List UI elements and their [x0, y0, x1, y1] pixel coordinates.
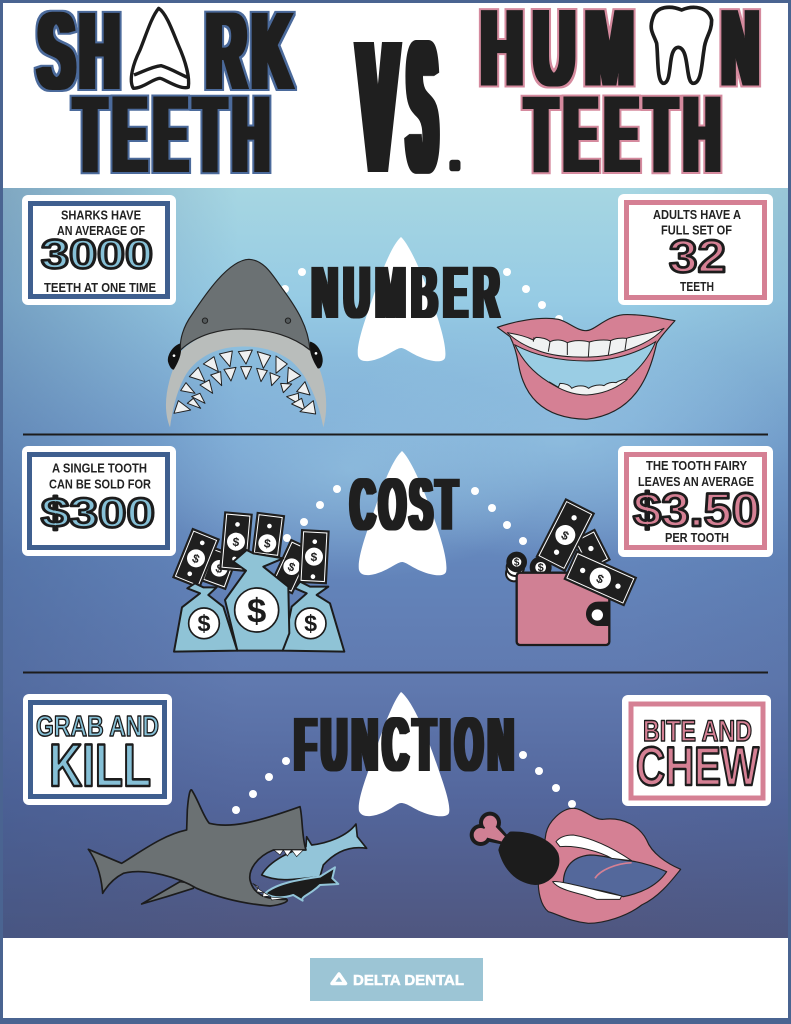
illustration: wallet with cash: $ [538, 562, 544, 574]
bill: $ [190, 551, 202, 566]
panel: human cost callout [618, 446, 773, 557]
coins [506, 553, 551, 581]
upper teeth [556, 835, 632, 861]
illustration: smiling lips [497, 315, 675, 419]
mouth opening [563, 855, 667, 897]
panel: human number callout: FULL SET OF [661, 222, 732, 238]
shark jaw [166, 329, 326, 427]
illustration: money bags: $ [304, 611, 317, 637]
tongue line [595, 863, 632, 878]
number: $300: $300 [41, 489, 155, 536]
logo triangle icon [332, 974, 346, 984]
dollar badges [189, 588, 326, 639]
panel: human cost callout: LEAVES AN AVERAGE [638, 474, 754, 489]
number: 3000: 3000 [41, 231, 153, 277]
heading: function: FUNCTION [294, 702, 519, 788]
illustration: money bags: $ [247, 592, 266, 630]
heading: number: NUMBER [312, 252, 505, 335]
center bag [225, 550, 289, 651]
panel: shark function callout [23, 694, 172, 805]
illustration: shark biting fish [88, 790, 367, 906]
bill [173, 529, 219, 588]
white shark tooth backdrop: cost [359, 451, 446, 575]
bill: $ [232, 535, 240, 549]
title: versus: S [409, 0, 435, 212]
panel: shark number callout: SHARKS HAVE [61, 208, 141, 222]
upper teeth [507, 328, 664, 357]
shark eyes [168, 342, 323, 370]
panel: human number callout: TEETH [680, 279, 714, 294]
icon: human tooth letter A [651, 7, 712, 83]
shark head top [180, 259, 310, 350]
shark teeth [174, 350, 316, 414]
illustration: money bags [173, 512, 344, 652]
bill: $ [286, 559, 298, 575]
panel: shark function callout: GRAB AND [36, 711, 159, 743]
title: versus: V [359, 1, 397, 213]
mouth opening [515, 342, 656, 394]
upper teeth gaps [533, 337, 627, 357]
illustration: wallet with cash: $ [514, 557, 520, 568]
blue fish [262, 824, 367, 880]
white shark tooth backdrop: number [358, 237, 445, 361]
fin [142, 882, 195, 904]
panel: shark number callout [22, 195, 176, 305]
right bag [283, 582, 344, 652]
bill [565, 551, 636, 605]
section divider lines [23, 434, 768, 674]
bill: $ [263, 536, 272, 551]
title: human teeth: TEETH [526, 74, 728, 197]
icon: shark tooth letter A [131, 8, 189, 88]
lower teeth [549, 379, 627, 395]
bill [201, 548, 237, 589]
panel: shark cost callout: CAN BE SOLD FOR [49, 476, 152, 492]
number: 32: 32 [669, 231, 726, 282]
drumstick meat [498, 832, 559, 885]
bill [253, 513, 284, 557]
lips [538, 808, 681, 923]
bill: $ [214, 561, 225, 576]
panel: human number callout [618, 194, 773, 305]
dotted arcs [232, 268, 576, 814]
illustration: money bags: $ [198, 611, 211, 637]
white shark tooth backdrop: function [359, 692, 449, 816]
bill [220, 512, 252, 571]
panel: shark number callout: AN AVERAGE OF [57, 223, 145, 238]
illustration: shark head [166, 259, 326, 427]
wallet body [517, 573, 609, 645]
panel: human cost callout: PER TOOTH [665, 530, 729, 545]
title: shark teeth: TEETH [75, 74, 277, 197]
logo: delta dental [310, 958, 483, 1001]
illustration: wallet with cash [506, 499, 636, 645]
drumstick bone [470, 812, 505, 846]
panel: shark number callout: TEETH AT ONE TIME [44, 280, 156, 295]
bill [537, 499, 594, 571]
bill: $ [559, 528, 571, 543]
left bag [174, 583, 237, 652]
title: versus [359, 0, 461, 213]
shark teeth [253, 850, 303, 900]
panel: human number callout: ADULTS HAVE A [653, 207, 742, 222]
panel: shark function callout: KILL [49, 732, 151, 799]
logo: delta dental: DELTA DENTAL [353, 973, 464, 989]
heading: cost: COST [350, 464, 461, 547]
wallet clasp [586, 602, 609, 626]
illustration: open mouth with drumstick [470, 808, 681, 923]
shark nostrils [202, 318, 291, 323]
panel: shark cost callout [22, 446, 176, 556]
bill [299, 530, 329, 583]
dark fish [265, 867, 338, 901]
bill [574, 530, 610, 570]
title: shark teeth [38, 0, 297, 197]
title: versus: . [449, 133, 461, 177]
bill: $ [310, 550, 318, 564]
panel: human function callout: BITE AND [643, 715, 752, 748]
panel: shark cost callout: A SINGLE TOOTH [52, 460, 147, 476]
bill: $ [594, 571, 606, 587]
bill [271, 540, 312, 593]
number: $3.50: $3.50 [633, 483, 760, 536]
panel: human cost callout: THE TOOTH FAIRY [646, 458, 747, 473]
shark body [88, 790, 306, 906]
lower teeth [553, 881, 622, 899]
title: human teeth [481, 0, 759, 197]
panel: human function callout [622, 695, 771, 806]
